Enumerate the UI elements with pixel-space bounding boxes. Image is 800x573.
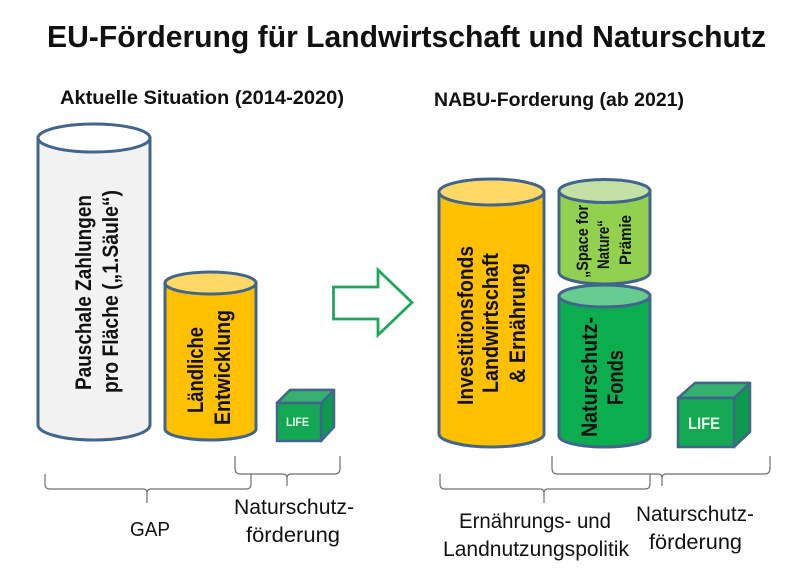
- brace: food and land-use policy: [440, 474, 650, 503]
- cube: LIFE large: LIFE: [688, 414, 720, 433]
- label: GAP: GAP: [130, 518, 170, 541]
- label: conservation funding right: Naturschutz-: [636, 503, 754, 526]
- cylinder: investment fund: [439, 179, 544, 447]
- label: food and land-use policy: Ernährungs- und: [459, 510, 611, 533]
- brace: conservation funding right: [552, 456, 770, 486]
- label: conservation funding right: förderung: [649, 531, 742, 554]
- cylinder: Space for Nature premium: Prämie: [616, 215, 635, 265]
- label: food and land-use policy: Landnutzungspolitik: [443, 538, 629, 561]
- cylinder: rural development: Entwicklung: [210, 310, 235, 425]
- cylinder: flat-rate payments: Pauschale Zahlungen: [71, 195, 96, 390]
- cube: LIFE large: [678, 383, 750, 447]
- cylinder: Space for Nature premium: „Space for: [573, 205, 592, 278]
- cylinder: Space for Nature premium: Nature“: [594, 220, 613, 269]
- cylinder: rural development: [165, 272, 256, 440]
- cylinder: investment fund: Landwirtschaft: [478, 253, 503, 393]
- heading: NABU demand: NABU-Forderung (ab 2021): [434, 89, 684, 111]
- title: EU-Förderung für Landwirtschaft und Naturschutz: [47, 19, 766, 54]
- cylinder: rural development: Ländliche: [183, 327, 208, 413]
- label: food and land-use policy: [443, 510, 629, 561]
- heading: current situation: Aktuelle Situation (2014-2020): [60, 87, 344, 109]
- cylinder: Space for Nature premium: [559, 180, 650, 284]
- cylinder: nature conservation fund: Naturschutz-: [577, 317, 602, 437]
- arrow: transition to proposal: [334, 270, 412, 335]
- cylinder: flat-rate payments: pro Fläche („1.Säule“): [98, 190, 123, 393]
- cylinder: nature conservation fund: Fonds: [603, 350, 628, 405]
- cylinder: flat-rate payments: [38, 124, 150, 440]
- brace: conservation funding left: [235, 456, 340, 486]
- brace: GAP: [45, 474, 251, 503]
- label: conservation funding left: Naturschutz-: [234, 496, 354, 519]
- cube: LIFE small: LIFE: [286, 415, 309, 429]
- cylinder: nature conservation fund: [559, 285, 650, 447]
- label: conservation funding right: [636, 503, 754, 554]
- label: conservation funding left: [234, 496, 354, 547]
- cube: LIFE small: [277, 390, 334, 441]
- cylinder: investment fund: Investitionsfonds: [453, 246, 478, 405]
- label: conservation funding left: förderung: [246, 524, 340, 547]
- cylinder: investment fund: & Ernährung: [505, 263, 530, 383]
